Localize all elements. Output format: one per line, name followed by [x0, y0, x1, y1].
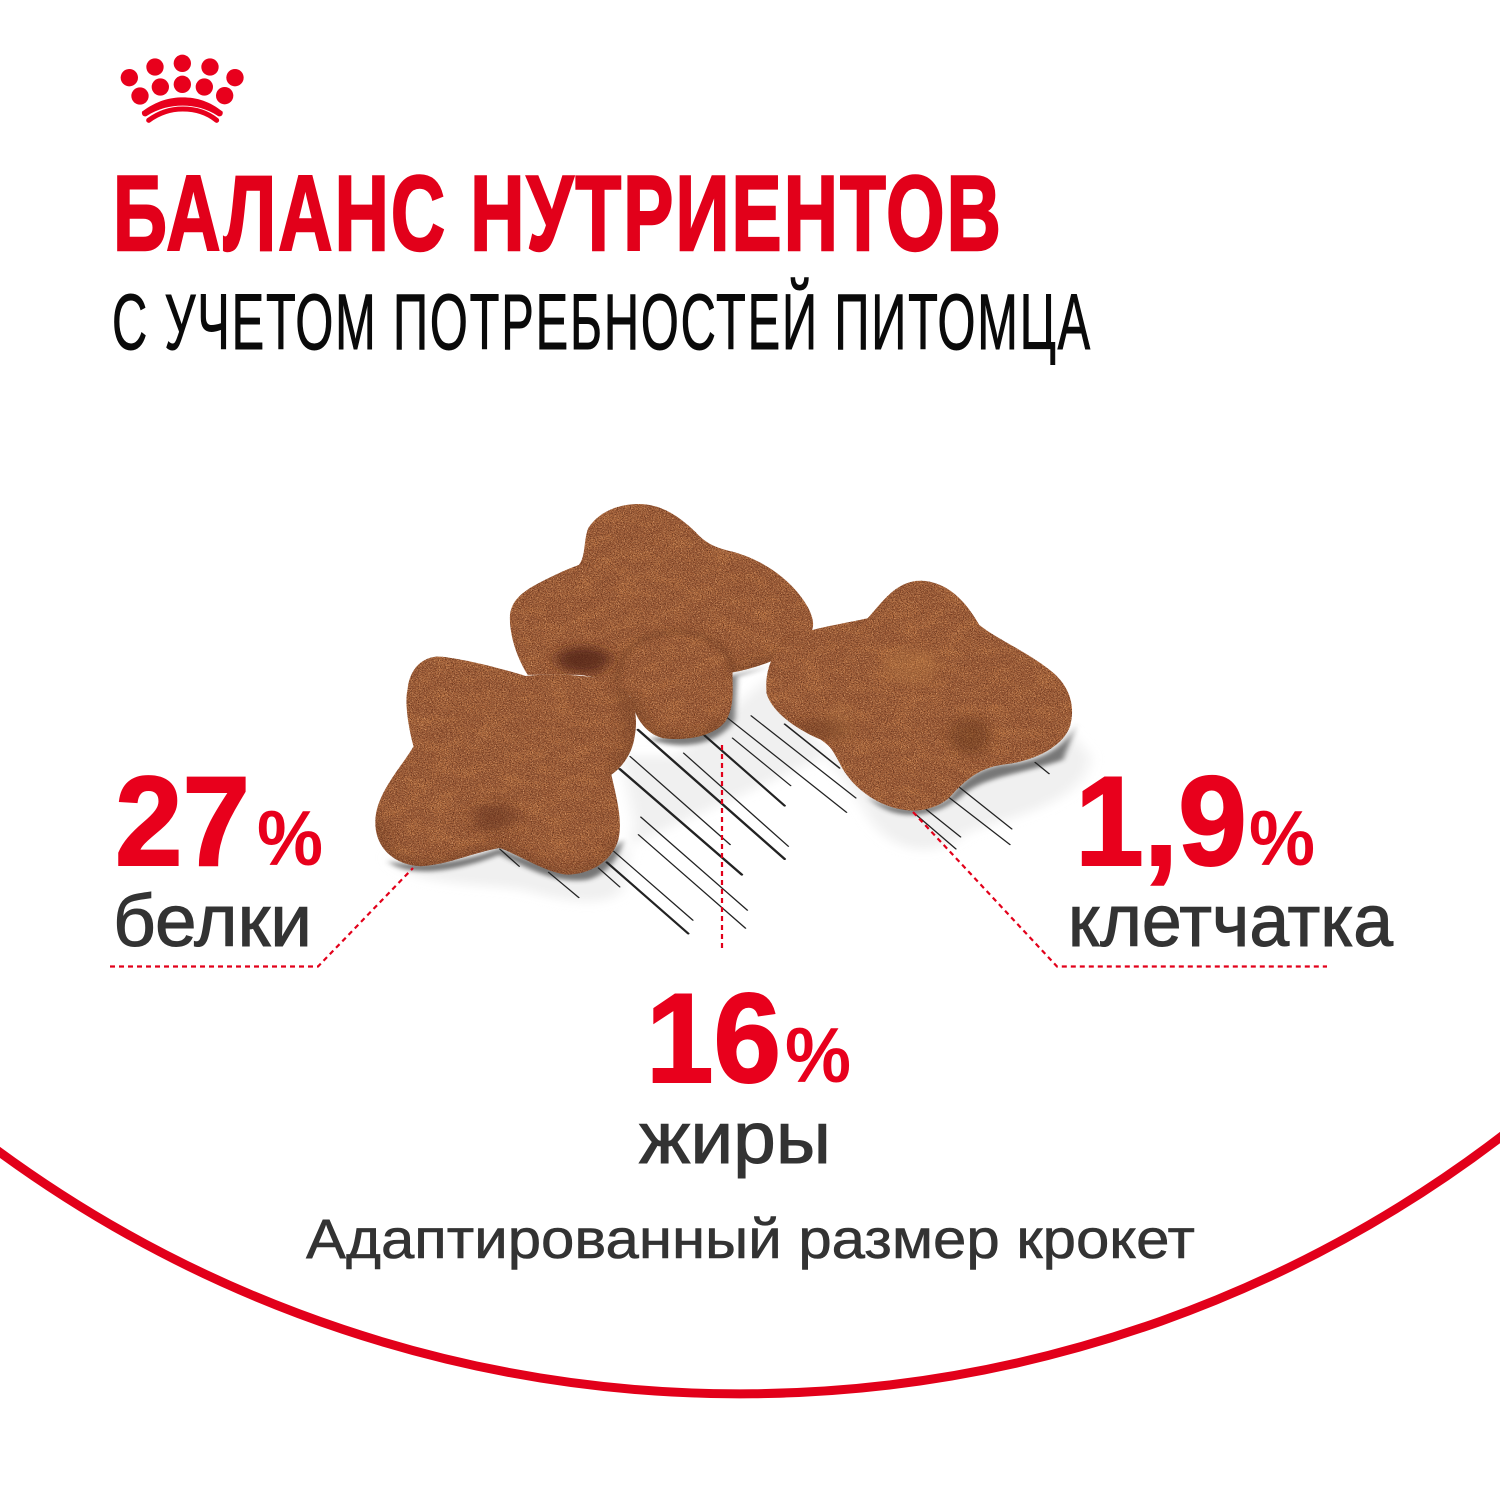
- title: БАЛАНС НУТРИЕНТОВ: [113, 153, 1003, 273]
- stat: fibre 1,9%: 1,9: [1075, 750, 1247, 892]
- icon: royal crown logo: [121, 55, 244, 120]
- stat: proteins 27%: 27: [115, 750, 250, 892]
- kibble illustration with shadows and hatching: [375, 504, 1090, 934]
- dotted leader: proteins: [110, 868, 413, 966]
- red arc: [0, 1133, 1500, 1394]
- stat: proteins 27%: белки: [113, 881, 312, 962]
- kibble: left: [375, 656, 636, 875]
- caption: Адаптированный размер крокет: [306, 1207, 1195, 1270]
- dark contact shadows: [388, 666, 1077, 881]
- pale ground shadows: [388, 676, 1090, 901]
- hatch lines: [500, 716, 1049, 934]
- kibble: middle: [510, 504, 813, 739]
- dotted leader: fats: [721, 745, 723, 951]
- dotted leader: fibre: [913, 812, 1327, 966]
- stat: fibre 1,9%: клетчатка: [1068, 881, 1393, 962]
- stat: proteins 27%: [113, 750, 323, 962]
- stat: fats 16%: 16: [646, 967, 781, 1109]
- stat: fats 16%: жиры: [639, 1098, 831, 1179]
- stat: fibre 1,9%: %: [1249, 794, 1315, 882]
- kibble: right: [766, 581, 1072, 811]
- stat: fibre 1,9%: [1068, 750, 1393, 962]
- stat: proteins 27%: %: [257, 794, 323, 882]
- stat: fats 16%: [639, 967, 851, 1179]
- stat: fats 16%: %: [785, 1011, 851, 1099]
